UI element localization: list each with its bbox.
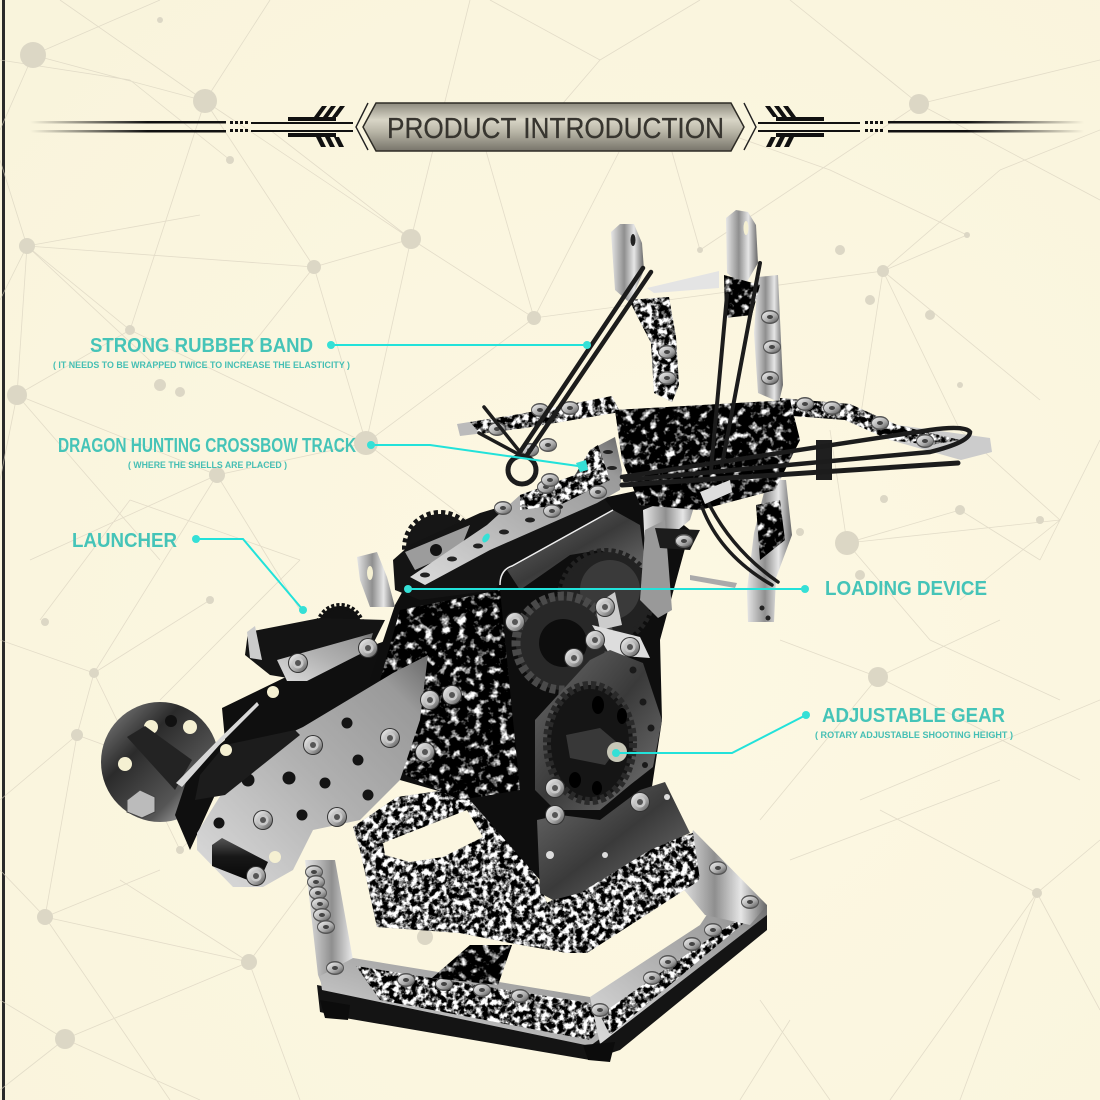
- label: LAUNCHER: [72, 529, 177, 552]
- title: PRODUCT INTRODUCTION: [387, 113, 724, 145]
- left descending strip: [629, 297, 679, 402]
- rear plate under track: [507, 510, 646, 590]
- large plate: [197, 655, 462, 887]
- second side plate and holes: [176, 686, 300, 800]
- chassis stem to rail: [432, 945, 512, 985]
- small gear: [318, 606, 362, 650]
- rear strip chrome bit: [405, 525, 470, 570]
- track strips: [393, 437, 622, 600]
- leader line: [367, 441, 588, 472]
- tab plate: [357, 552, 395, 607]
- band right vertical: [711, 263, 760, 470]
- leader line: [327, 341, 591, 349]
- sublabel: ( WHERE THE SHELLS ARE PLACED ): [128, 460, 287, 470]
- label: DRAGON HUNTING CROSSBOW TRACK: [58, 434, 356, 457]
- title plate: [363, 103, 744, 151]
- metal crossbow model: [101, 210, 992, 1062]
- right rail: [590, 905, 767, 1044]
- feet: [320, 1000, 615, 1062]
- adjustable gear: [547, 685, 633, 801]
- plate holes: [214, 718, 374, 828]
- left border line: [2, 0, 5, 1100]
- band horizontal: [622, 428, 970, 480]
- leader line: [612, 711, 810, 757]
- screw stack right: [585, 520, 737, 658]
- leader line: [404, 585, 809, 593]
- base bolts: [305, 861, 759, 1017]
- callout: launcher: [72, 529, 307, 614]
- left ornament: [30, 103, 368, 150]
- band ring: [508, 456, 536, 484]
- base frame: [305, 830, 767, 1062]
- uprights: [611, 210, 783, 402]
- track holes: [420, 450, 617, 578]
- front hex plate: [535, 650, 662, 810]
- inner chassis: [353, 787, 700, 985]
- gears: [505, 552, 651, 690]
- crossbow arms: [457, 396, 992, 510]
- upper launcher roller assembly: [245, 618, 385, 681]
- callout: crossbow track: [58, 434, 588, 472]
- rear gear: [406, 514, 474, 582]
- thin white edge: [500, 510, 613, 585]
- chrome plate right of track: [643, 487, 700, 550]
- sublabel: ( ROTARY ADJUSTABLE SHOOTING HEIGHT ): [815, 730, 1013, 740]
- lower right upright: [747, 480, 792, 622]
- plate cylinder: [212, 838, 268, 884]
- callout: adjustable gear: [612, 704, 1013, 757]
- label: STRONG RUBBER BAND: [90, 334, 313, 357]
- top slotted plate texture: [520, 445, 610, 510]
- band clip: [700, 480, 732, 504]
- gear axle: [566, 728, 620, 765]
- track marker: [481, 532, 491, 544]
- rear strip: [393, 480, 613, 600]
- chassis plate: [353, 787, 700, 953]
- mechanism texture: [380, 590, 520, 800]
- arm rivets: [488, 397, 934, 487]
- right back rail: [680, 830, 767, 925]
- sublabel: ( IT NEEDS TO BE WRAPPED TWICE TO INCREASE THE ELASTICITY ): [53, 360, 350, 370]
- rubber bands: [479, 263, 970, 585]
- central bow block: [615, 400, 800, 510]
- callout: strong rubber band: [53, 334, 591, 370]
- right descending strip: [754, 275, 783, 402]
- label: LOADING DEVICE: [825, 577, 987, 600]
- main track plate: [410, 437, 622, 585]
- left post: [611, 224, 644, 303]
- gear holes: [569, 696, 627, 795]
- base underside: [317, 905, 767, 1060]
- right ornament: [744, 103, 1084, 150]
- label: ADJUSTABLE GEAR: [822, 704, 1005, 727]
- chassis cutout: [383, 810, 483, 862]
- band lower: [702, 502, 778, 585]
- roller: [127, 726, 192, 790]
- chassis texture: [353, 787, 700, 953]
- disc wheel: [101, 702, 219, 822]
- front rail: [320, 958, 612, 1046]
- central dark mechanism: [370, 490, 690, 880]
- lower right bracket: [537, 782, 690, 900]
- nut: [127, 790, 155, 818]
- arm post: [816, 440, 832, 480]
- left strut: [305, 860, 372, 985]
- launcher dark body: [175, 625, 460, 850]
- callout: loading device: [404, 532, 987, 600]
- band left: [518, 268, 651, 455]
- right post: [726, 210, 758, 287]
- track screws: [494, 501, 512, 515]
- banner header: [30, 103, 1084, 151]
- band short left: [479, 407, 520, 455]
- rear cross bar: [647, 271, 719, 293]
- leader line: [192, 535, 307, 614]
- disc holes: [118, 720, 197, 771]
